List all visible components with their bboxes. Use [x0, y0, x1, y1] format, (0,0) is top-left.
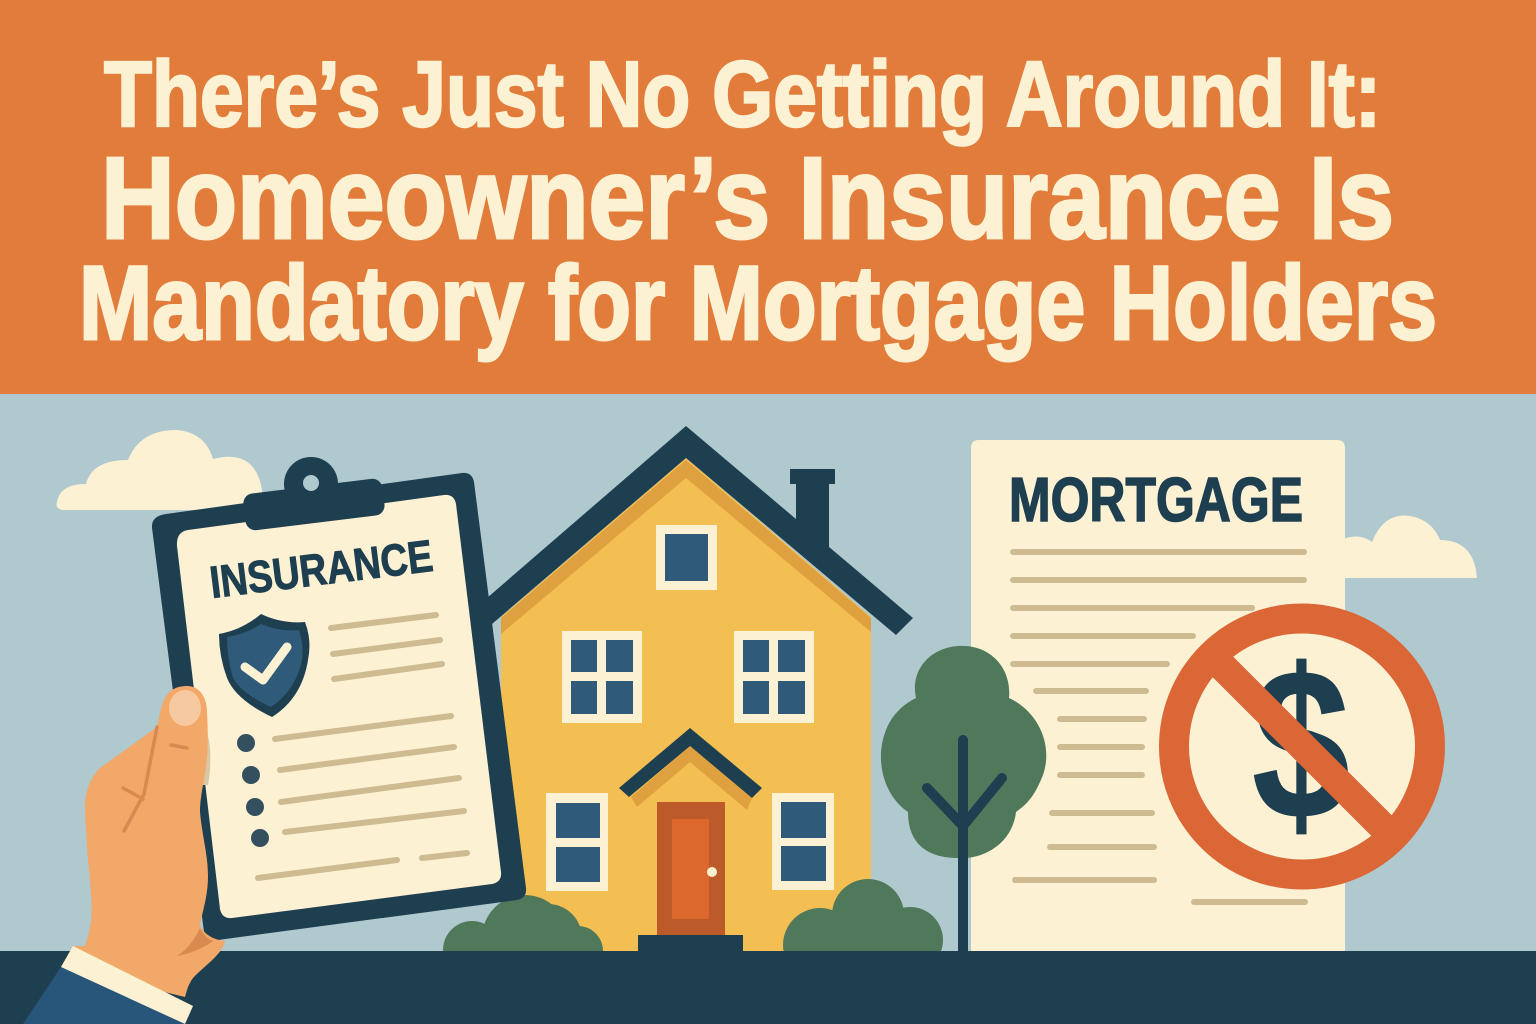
clipboard clip	[242, 457, 386, 531]
bush left	[443, 895, 603, 981]
thumb shadow	[203, 725, 210, 785]
checklist lines	[258, 615, 467, 878]
ground	[0, 951, 1536, 1024]
house	[480, 426, 913, 951]
title line 2: Homeowner’s Insurance Is	[101, 133, 1394, 263]
house body	[501, 458, 871, 951]
title banner	[0, 0, 1536, 394]
prohibition slash	[1211, 655, 1393, 837]
mortgage heading: MORTGAGE	[1009, 466, 1303, 535]
clipboard	[152, 457, 526, 940]
cloud right	[1340, 516, 1477, 578]
porch roof	[619, 728, 762, 798]
hand creases	[123, 727, 187, 831]
cloud left	[57, 430, 262, 510]
roof	[480, 426, 913, 635]
door	[657, 802, 725, 936]
palm shadow	[177, 928, 213, 956]
thumbnail	[169, 690, 201, 726]
porch shadow	[631, 746, 752, 810]
sky background	[0, 394, 1536, 1024]
dollar symbol: $	[1252, 625, 1350, 864]
attic window	[656, 525, 717, 590]
right upper window	[734, 631, 814, 723]
tree	[881, 646, 1046, 951]
door step	[638, 935, 743, 951]
left lower window	[546, 793, 608, 891]
suit sleeve	[23, 967, 185, 1024]
right lower window	[772, 793, 834, 890]
document text lines	[1013, 552, 1305, 902]
shield icon	[219, 614, 309, 717]
tree trunk	[927, 740, 1002, 951]
roof shadow	[501, 460, 871, 634]
hand	[23, 686, 225, 1024]
clipboard paper	[177, 495, 501, 918]
mortgage document	[971, 440, 1345, 951]
left upper window	[562, 631, 642, 723]
hand shape	[61, 686, 225, 997]
bush right	[783, 879, 943, 982]
checklist bullets	[237, 734, 269, 847]
shirt cuff	[61, 946, 193, 1024]
insurance heading: INSURANCE	[207, 530, 436, 608]
no-dollar sign	[1174, 618, 1430, 874]
chimney	[790, 469, 835, 560]
